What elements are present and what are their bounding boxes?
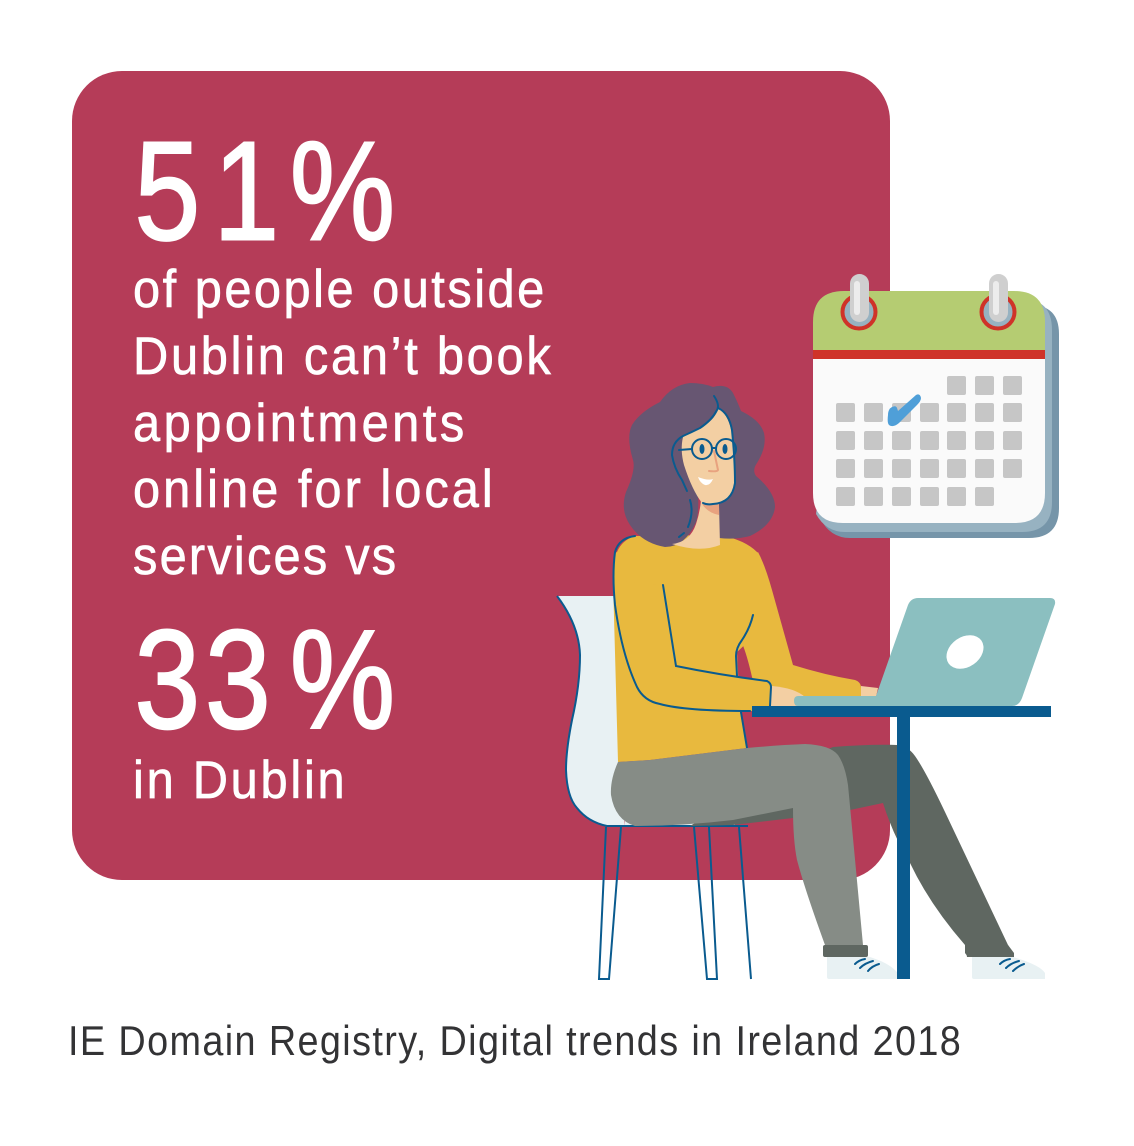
icon: check mark (888, 394, 921, 426)
shoes (827, 957, 1045, 979)
torso (613, 535, 765, 762)
description lines: Dublin can’t book (133, 326, 551, 385)
neck (672, 500, 720, 549)
description lines: appointments (133, 393, 464, 452)
chair (557, 596, 751, 979)
illustration: woman at desk (557, 383, 1055, 979)
description lines: of people outside (133, 259, 544, 318)
panel: red background (72, 71, 890, 880)
source line: IE Domain Registry, Digital trends in Ireland 2018 (68, 1018, 961, 1064)
text block: statistics (133, 112, 551, 809)
far leg (690, 745, 1014, 957)
shoe laces (855, 959, 1024, 971)
head: face (682, 408, 735, 504)
laptop (794, 598, 1055, 706)
icon: calendar (813, 274, 1059, 538)
stat: 51%: 51% (134, 112, 395, 270)
far hand (861, 686, 878, 697)
eyes (700, 444, 728, 454)
calendar rings (842, 274, 1014, 328)
face details (672, 396, 736, 537)
sweater outlines (614, 536, 771, 748)
near arm (613, 580, 771, 711)
far arm (742, 552, 861, 697)
front leg (611, 744, 863, 945)
text: in Dublin: in Dublin (133, 750, 345, 809)
head: hair (624, 383, 775, 547)
description lines: online for local (133, 459, 493, 518)
desk (752, 706, 1051, 979)
neck shadow (702, 502, 719, 515)
description lines (133, 259, 551, 585)
description lines: services vs (133, 526, 396, 585)
smile (698, 477, 713, 485)
near hand (770, 686, 805, 706)
cuffs (823, 945, 1014, 957)
stat: 33%: 33% (134, 600, 395, 758)
calendar day grid (836, 376, 1022, 506)
